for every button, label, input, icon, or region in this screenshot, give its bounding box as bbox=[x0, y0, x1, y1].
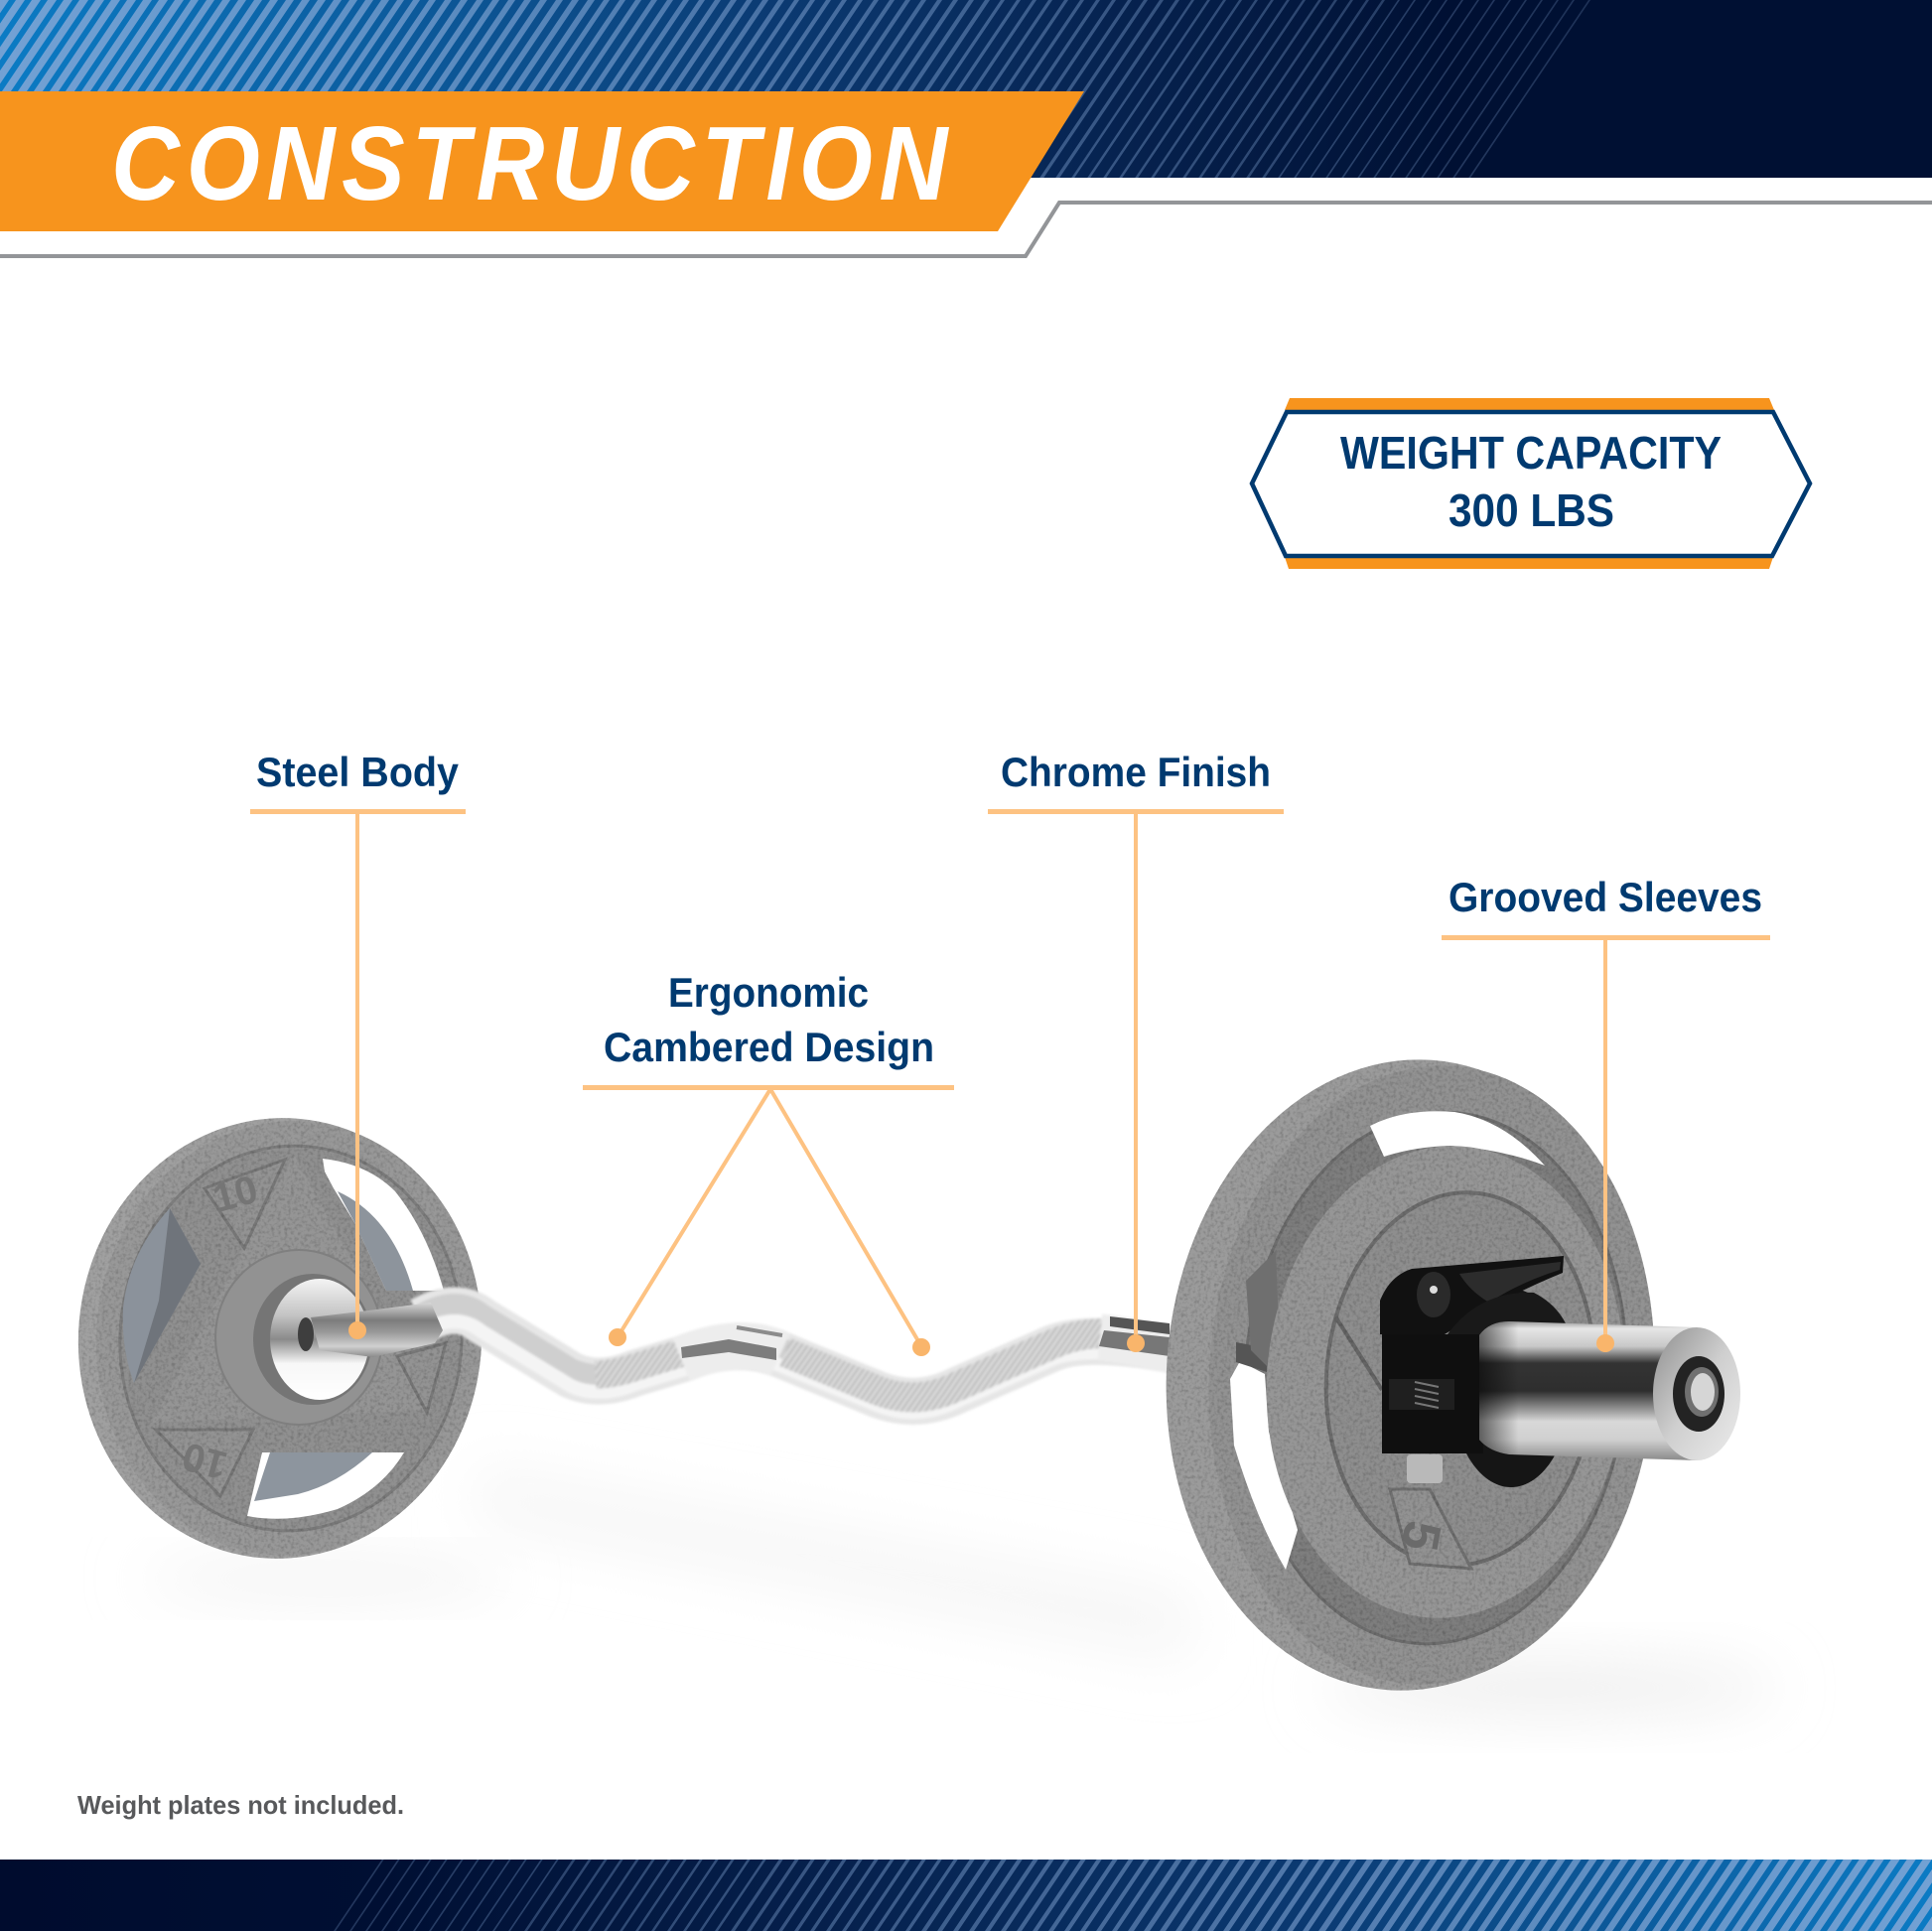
bar body bbox=[422, 1306, 1191, 1412]
bar stub at left plate bbox=[311, 1303, 443, 1357]
plate spoke behind bbox=[1246, 1251, 1281, 1380]
footer banner bbox=[0, 1860, 1932, 1931]
grooved sleeve bbox=[1479, 1321, 1740, 1460]
callout: Steel Body: Steel Body bbox=[256, 749, 460, 795]
left plate body bbox=[60, 1101, 500, 1576]
left weight plate bbox=[60, 1101, 500, 1576]
weight capacity badge: WEIGHT CAPACITY bbox=[1340, 427, 1722, 479]
big plate left window bbox=[1230, 1361, 1298, 1570]
plate number 5: 5 bbox=[1390, 1517, 1451, 1555]
chrome bands on bar bbox=[681, 1339, 776, 1360]
callout: Ergonomic Cambered Design bbox=[583, 969, 954, 1356]
callout: Ergonomic Cambered Design: Cambered Design bbox=[604, 1024, 934, 1070]
small front plate bbox=[1251, 1134, 1640, 1630]
big plate body bbox=[1145, 1043, 1675, 1707]
callout: Chrome Finish: Chrome Finish bbox=[1001, 749, 1271, 795]
callout: Chrome Finish bbox=[988, 749, 1284, 1352]
footnote: Weight plates not included. bbox=[77, 1790, 404, 1820]
weight capacity badge: 300 LBS bbox=[1449, 484, 1614, 536]
left plate window bottom bbox=[247, 1452, 404, 1519]
right weight plate bbox=[1145, 1043, 1740, 1707]
chrome collar bbox=[270, 1279, 369, 1400]
curl bar bbox=[311, 1303, 1191, 1412]
bar seen through window bbox=[1236, 1342, 1267, 1372]
title: CONSTRUCTION bbox=[111, 105, 949, 222]
callout: Steel Body bbox=[250, 749, 466, 1339]
title banner bbox=[0, 91, 1084, 231]
left plate window left bbox=[123, 1208, 201, 1383]
callout: Grooved Sleeves: Grooved Sleeves bbox=[1449, 874, 1762, 920]
clamp thumb screw bbox=[1407, 1454, 1443, 1483]
callout: Ergonomic Cambered Design: Ergonomic bbox=[668, 969, 869, 1016]
left weight plate: 10 bbox=[178, 1434, 231, 1487]
collar clamp bbox=[1380, 1256, 1574, 1487]
left plate window upper right bbox=[323, 1159, 444, 1291]
floor shadows bbox=[139, 1469, 1777, 1710]
weight capacity badge bbox=[1252, 398, 1810, 569]
callout: Grooved Sleeves bbox=[1442, 874, 1770, 1352]
big plate top window bbox=[1370, 1111, 1545, 1166]
header grey rule bbox=[0, 203, 1932, 256]
plate numbers: 10 bbox=[208, 1168, 262, 1221]
left plate hub bbox=[215, 1250, 382, 1425]
header banner background bbox=[0, 0, 1932, 178]
